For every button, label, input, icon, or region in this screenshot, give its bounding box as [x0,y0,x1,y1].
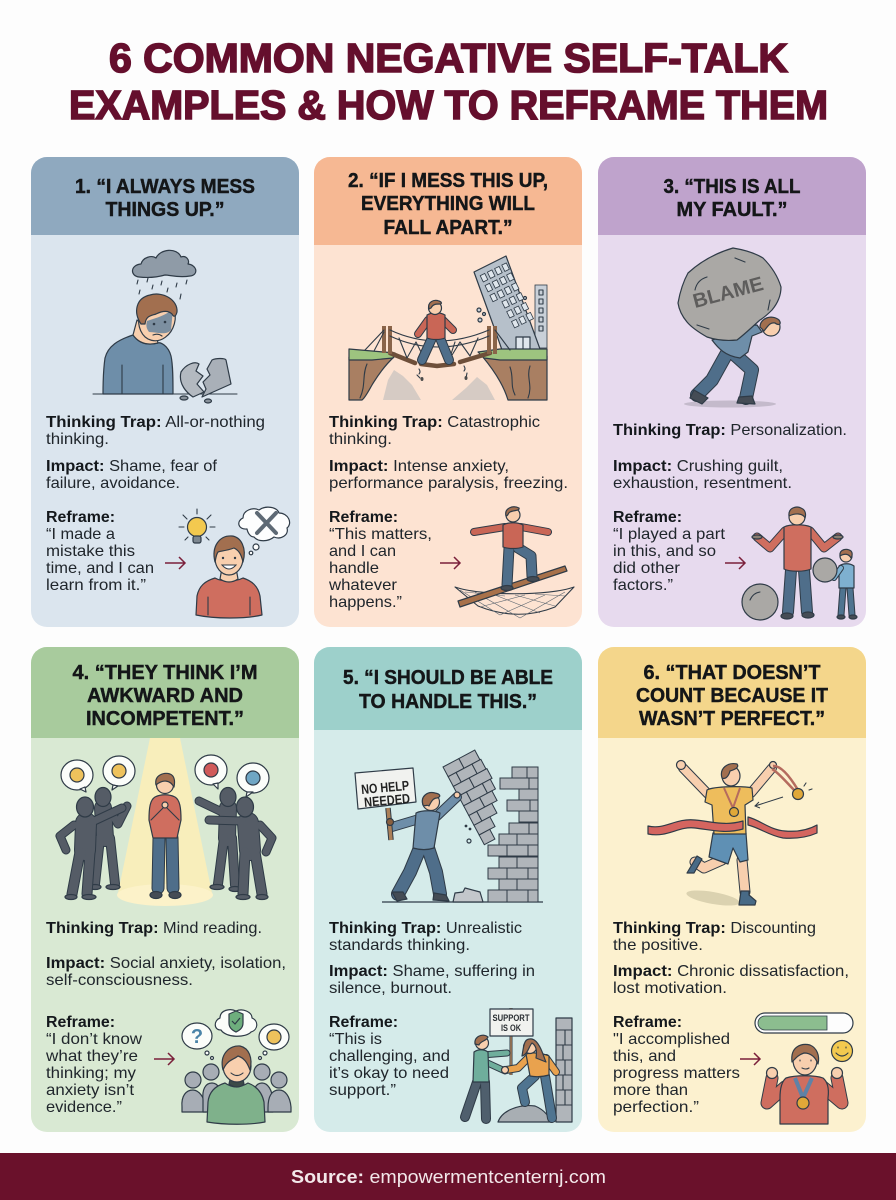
silhouette: rear left [89,788,127,890]
text: card 4 body: evidence.” [46,1099,122,1116]
icon: sad man under rain cloud with broken heart [93,250,237,403]
arrow: card 3 [725,557,745,569]
card 6 header: WASN’T PERFECT.” [639,707,825,730]
text: card 5 body: challenging, and [329,1048,450,1065]
icon: two people helping with SUPPORT IS OK sign [465,1008,572,1122]
card 1 header: 1. “I ALWAYS MESS [75,175,255,198]
silhouette: front left [60,797,122,900]
footer source bar: Source: empowermentcenternj.com [291,1167,606,1187]
text: card 5 body: silence, burnout. [329,980,452,997]
card 1 header: THINGS UP.” [106,198,224,221]
title: 6 COMMON NEGATIVE SELF-TALK [109,35,788,81]
text: card 5 body: “This is [329,1031,382,1048]
text: card 3 body: Thinking Trap: Personalization. [613,422,847,439]
icon: man carrying BLAME boulder [678,248,781,408]
footer source bar [0,1153,896,1200]
text: card 6 body: Reframe: [613,1014,682,1031]
panel: card 5 should handle this [314,647,582,1132]
broken brick wall [488,767,538,902]
icon: man carrying BLAME boulder: BLAME [691,273,766,313]
text: card 3 body: Impact: Crushing guilt, [613,458,783,475]
title [69,35,828,128]
card 4 header: 4. “THEY THINK I’M [72,661,258,684]
text: card 2 body: Impact: Intense anxiety, [329,458,509,475]
card 5 header: TO HANDLE THIS.” [359,690,537,713]
text: card 2 body: “This matters, [329,526,432,543]
text: card 2 body: thinking. [329,431,392,448]
text: card 5 body: support.” [329,1082,396,1099]
text: card 2 body: Reframe: [329,509,398,526]
text: card 6 body: lost motivation. [613,980,727,997]
text: card 1 body: learn from it.” [46,577,146,594]
text: card 4 body: anxiety isn’t [46,1082,135,1099]
text: card 1 body [46,414,265,594]
text: card 6 body: Thinking Trap: Discounting [613,920,816,937]
text: card 6 body: perfection.” [613,1099,699,1116]
silhouette: front right [209,797,272,900]
icon: smiling man with lightbulb and tools thought [179,507,290,618]
panel: card 6 doesn't count [598,647,866,1132]
card 4 header: INCOMPETENT.” [86,707,244,730]
text: card 2 body: performance paralysis, freezing. [329,475,568,492]
card 3 header [598,157,866,235]
text: card 6 body: progress matters [613,1065,740,1082]
text: card 3 body: exhaustion, resentment. [613,475,792,492]
card 6 header: COUNT BECAUSE IT [636,684,828,707]
progress bar [755,1013,853,1033]
text: card 5 body: Thinking Trap: Unrealistic [329,920,522,937]
panel: card 4 think I'm awkward [31,647,299,1132]
text: card 2 body: happens.” [329,594,402,611]
text: card 6 body: more than [613,1082,688,1099]
icon: calm man with thought bubbles and crowd: ? [191,1026,203,1048]
text: card 1 body: Reframe: [46,509,115,526]
text: card 4 body [45,920,286,1116]
text: card 6 body: the positive. [613,937,703,954]
silhouette: rear right [199,788,241,892]
icon: two people helping with SUPPORT IS OK sign: SUPPORT [492,1013,530,1024]
title: EXAMPLES & HOW TO REFRAME THEM [69,82,828,128]
icon: man holding NO HELP NEEDED sign and falling wall: NEEDED [363,791,411,810]
text: card 3 body: “I played a part [613,526,726,543]
text: card 4 body: Impact: Social anxiety, isolation, [46,955,286,972]
arrow: card 6 [740,1053,760,1065]
text: card 2 body: Thinking Trap: Catastrophic [329,414,540,431]
text: card 2 body [328,414,568,611]
text: card 1 body: “I made a [46,526,115,543]
card 5 header [314,647,582,730]
card 2 header: FALL APART.” [384,216,512,239]
icon: man holding NO HELP NEEDED sign and falling wall [355,749,543,902]
text: card 4 body: what they’re [45,1048,138,1065]
icon: proud man with medal, progress bar and smiley [755,1013,853,1124]
text: card 1 body: Impact: Shame, fear of [46,458,218,475]
text: card 3 body: in this, and so [613,543,716,560]
card 6 header [598,647,866,738]
text: card 3 body: factors.” [613,577,673,594]
icon: man and child sharing boulders [742,507,857,620]
text: card 3 body [613,422,847,594]
card 4 header [31,647,299,738]
text: card 1 body: mistake this [46,543,135,560]
card 6 header: 6. “THAT DOESN’T [644,661,821,684]
arrow: card 1 [165,557,185,569]
falling wall section [443,749,518,845]
card 1 header [31,157,299,235]
card 3 header: 3. “THIS IS ALL [664,175,800,198]
icon: man in spotlight with pointing silhouettes [60,738,272,906]
text: card 2 body: whatever [328,577,398,594]
text: card 4 body: Thinking Trap: Mind reading. [46,920,262,937]
text: card 1 body: thinking. [46,431,109,448]
text: card 4 body: “I don’t know [46,1031,142,1048]
text: card 5 body: standards thinking. [329,937,470,954]
text: card 6 body: Impact: Chronic dissatisfaction, [613,963,849,980]
text: card 2 body: and I can [329,543,396,560]
text: card 6 body [613,920,849,1116]
panel: card 3 all my fault [598,157,866,627]
arrow: card 2 [440,557,460,569]
card 2 header: EVERYTHING WILL [361,192,535,215]
text: card 5 body [329,920,535,1099]
text: card 6 body: this, and [613,1048,676,1065]
text: card 1 body: Thinking Trap: All-or-nothing [46,414,265,431]
arrow: card 4 [154,1053,174,1065]
icon: calm man with thought bubbles and crowd [182,1010,291,1124]
card 3 header: MY FAULT.” [676,198,788,221]
card 4 header: AWKWARD AND [87,684,243,707]
card 2 header [314,157,582,245]
panel: card 1 always mess up [31,157,299,627]
text: card 1 body: time, and I can [46,560,154,577]
text: card 4 body: thinking; my [46,1065,136,1082]
icon: man balancing on plank over safety net [455,507,574,618]
text: card 4 body: self-consciousness. [46,972,193,989]
icon: man holding NO HELP NEEDED sign and falling wall: NO HELP [361,778,410,797]
text: card 2 body: handle [329,560,379,577]
text: card 5 body: Reframe: [329,1014,398,1031]
text: card 6 body: "I accomplished [613,1031,730,1048]
card 2 header: 2. “IF I MESS THIS UP, [348,169,548,192]
icon: two people helping with SUPPORT IS OK sign: IS OK [501,1023,521,1034]
card 5 header: 5. “I SHOULD BE ABLE [343,666,553,689]
text: card 4 body: Reframe: [46,1014,115,1031]
text: card 3 body: Reframe: [613,509,682,526]
text: card 1 body: failure, avoidance. [46,475,180,492]
text: card 5 body: it’s okay to need [329,1065,449,1082]
icon: man on collapsing bridge with falling building [349,256,547,400]
panel: card 2 everything will fall apart [314,157,582,627]
text: card 3 body: did other [613,560,681,577]
icon: runner at finish line with discarded medal [648,760,817,909]
text: card 5 body: Impact: Shame, suffering in [329,963,535,980]
